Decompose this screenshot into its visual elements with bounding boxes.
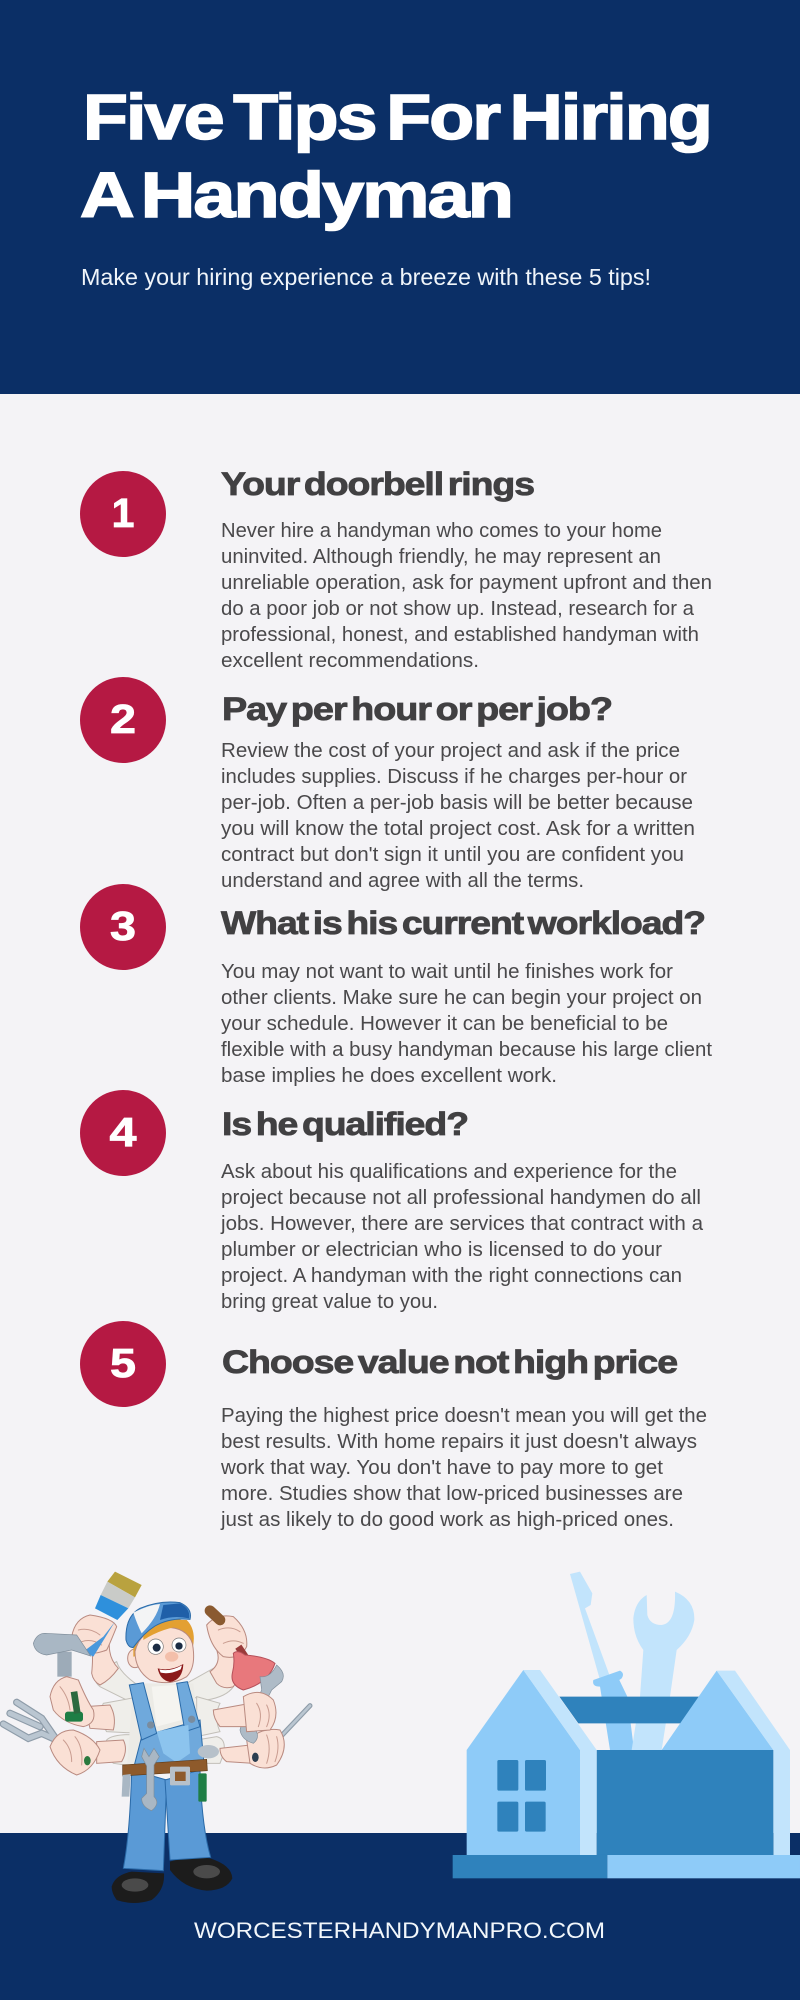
- title: [80, 81, 711, 231]
- body text 3: other clients. Make sure he can begin your project on: [221, 987, 702, 1009]
- body text 5: work that way. You don't have to pay more to get: [220, 1457, 663, 1479]
- body text 4: Ask about his qualifications and experience for the: [221, 1161, 677, 1183]
- number badge 5: 5: [110, 1340, 136, 1386]
- left gable with windows: [467, 1670, 597, 1855]
- heading 1: Your doorbell rings: [221, 466, 534, 502]
- body text 2: [221, 740, 695, 892]
- body text 5: Paying the highest price doesn't mean you will get the: [221, 1405, 707, 1427]
- footer band: [0, 1833, 800, 2000]
- hammer: [33, 1633, 91, 1677]
- body text 3: [221, 961, 712, 1087]
- heading 4: Is he qualified?: [222, 1106, 468, 1142]
- tool belt: [122, 1745, 219, 1811]
- base platform: [453, 1855, 800, 1878]
- overall legs: [123, 1770, 211, 1871]
- upper forearms and hands: [72, 1615, 247, 1688]
- number badge 2: 2: [110, 696, 136, 742]
- spanner: [240, 1665, 283, 1743]
- icon: toolbox house: [453, 1572, 800, 1878]
- toolbox body: [597, 1750, 773, 1855]
- body text 5: best results. With home repairs it just doesn't always: [221, 1431, 697, 1453]
- body text 2: contract but don't sign it until you are confident you: [221, 844, 684, 866]
- upper and middle sleeves: [95, 1662, 233, 1737]
- garden fork: [3, 1702, 57, 1740]
- number badge 1: 1: [112, 490, 134, 536]
- number badge 4: 4: [110, 1109, 137, 1155]
- wrench: [632, 1592, 694, 1750]
- number badge 3: 3: [110, 903, 136, 949]
- body text 5: just as likely to do good work as high-priced ones.: [220, 1509, 674, 1531]
- head: [126, 1602, 194, 1683]
- toolbox handle: [559, 1697, 722, 1723]
- body text 4: plumber or electrician who is licensed to do your: [221, 1239, 662, 1261]
- number badge 4: [80, 1090, 166, 1176]
- illustration: handyman with six arms: [3, 1572, 310, 1903]
- number badge 3: [80, 884, 166, 970]
- body text 1: [221, 520, 712, 672]
- subtitle: Make your hiring experience a breeze with these 5 tips!: [81, 264, 651, 290]
- middle forearms and hands: [50, 1677, 276, 1732]
- lower left and right hands: [50, 1729, 284, 1775]
- heading 2: Pay per hour or per job?: [222, 691, 612, 727]
- panel: header: [0, 0, 800, 394]
- shoes: [112, 1857, 232, 1903]
- panel: tip 5: [80, 1321, 707, 1531]
- number badge 2: [80, 677, 166, 763]
- body text 1: do a poor job or not show up. Instead, research for a: [221, 598, 695, 620]
- body text 1: Never hire a handyman who comes to your home: [221, 520, 662, 542]
- body text 2: per-job. Often a per-job basis will be better because: [221, 792, 693, 814]
- panel: tip 3: [80, 884, 712, 1087]
- heading 3: What is his current workload?: [221, 905, 705, 941]
- body text 5: more. Studies show that low-priced businesses are: [221, 1483, 683, 1505]
- number badge 1: [80, 471, 166, 557]
- body text 1: unreliable operation, ask for payment upfront and then: [221, 572, 712, 594]
- body text 1: excellent recommendations.: [221, 650, 479, 672]
- body text 4: [220, 1161, 704, 1313]
- number badge 5: [80, 1321, 166, 1407]
- body text 4: jobs. However, there are services that contract with a: [220, 1213, 704, 1235]
- body text 2: understand and agree with all the terms.: [221, 870, 584, 892]
- title: A Handyman: [80, 159, 512, 231]
- right gable: [662, 1671, 790, 1855]
- body text 1: professional, honest, and established handyman with: [221, 624, 699, 646]
- torso: [127, 1682, 204, 1772]
- body text 3: flexible with a busy handyman because his large client: [221, 1039, 712, 1061]
- body text 5: [220, 1405, 707, 1531]
- body text 2: includes supplies. Discuss if he charges per-hour or: [221, 766, 687, 788]
- panel: tip 1: [80, 466, 712, 672]
- screwdriver: [570, 1572, 634, 1750]
- body text 4: bring great value to you.: [221, 1291, 438, 1313]
- title: Five Tips For Hiring: [83, 81, 711, 153]
- body text 3: your schedule. However it can be beneficial to be: [221, 1013, 668, 1035]
- body text 2: Review the cost of your project and ask if the price: [221, 740, 680, 762]
- body text 3: You may not want to wait until he finishes work for: [221, 961, 673, 983]
- lower arms: [97, 1735, 253, 1767]
- panel: tip 2: [80, 677, 695, 892]
- plunger: [210, 1611, 275, 1690]
- body text 1: uninvited. Although friendly, he may represent an: [221, 546, 661, 568]
- paint brush: [83, 1572, 142, 1657]
- body text 3: base implies he does excellent work.: [221, 1065, 557, 1087]
- body text 4: project because not all professional handymen do all: [221, 1187, 701, 1209]
- heading 5: Choose value not high price: [222, 1344, 677, 1380]
- body text 2: you will know the total project cost. Ask for a written: [221, 818, 695, 840]
- body text 4: project. A handyman with the right connections can: [221, 1265, 682, 1287]
- screwdriver tool: [281, 1706, 310, 1737]
- footer website: WORCESTERHANDYMANPRO.COM: [194, 1918, 605, 1943]
- panel: tip 4: [80, 1090, 704, 1313]
